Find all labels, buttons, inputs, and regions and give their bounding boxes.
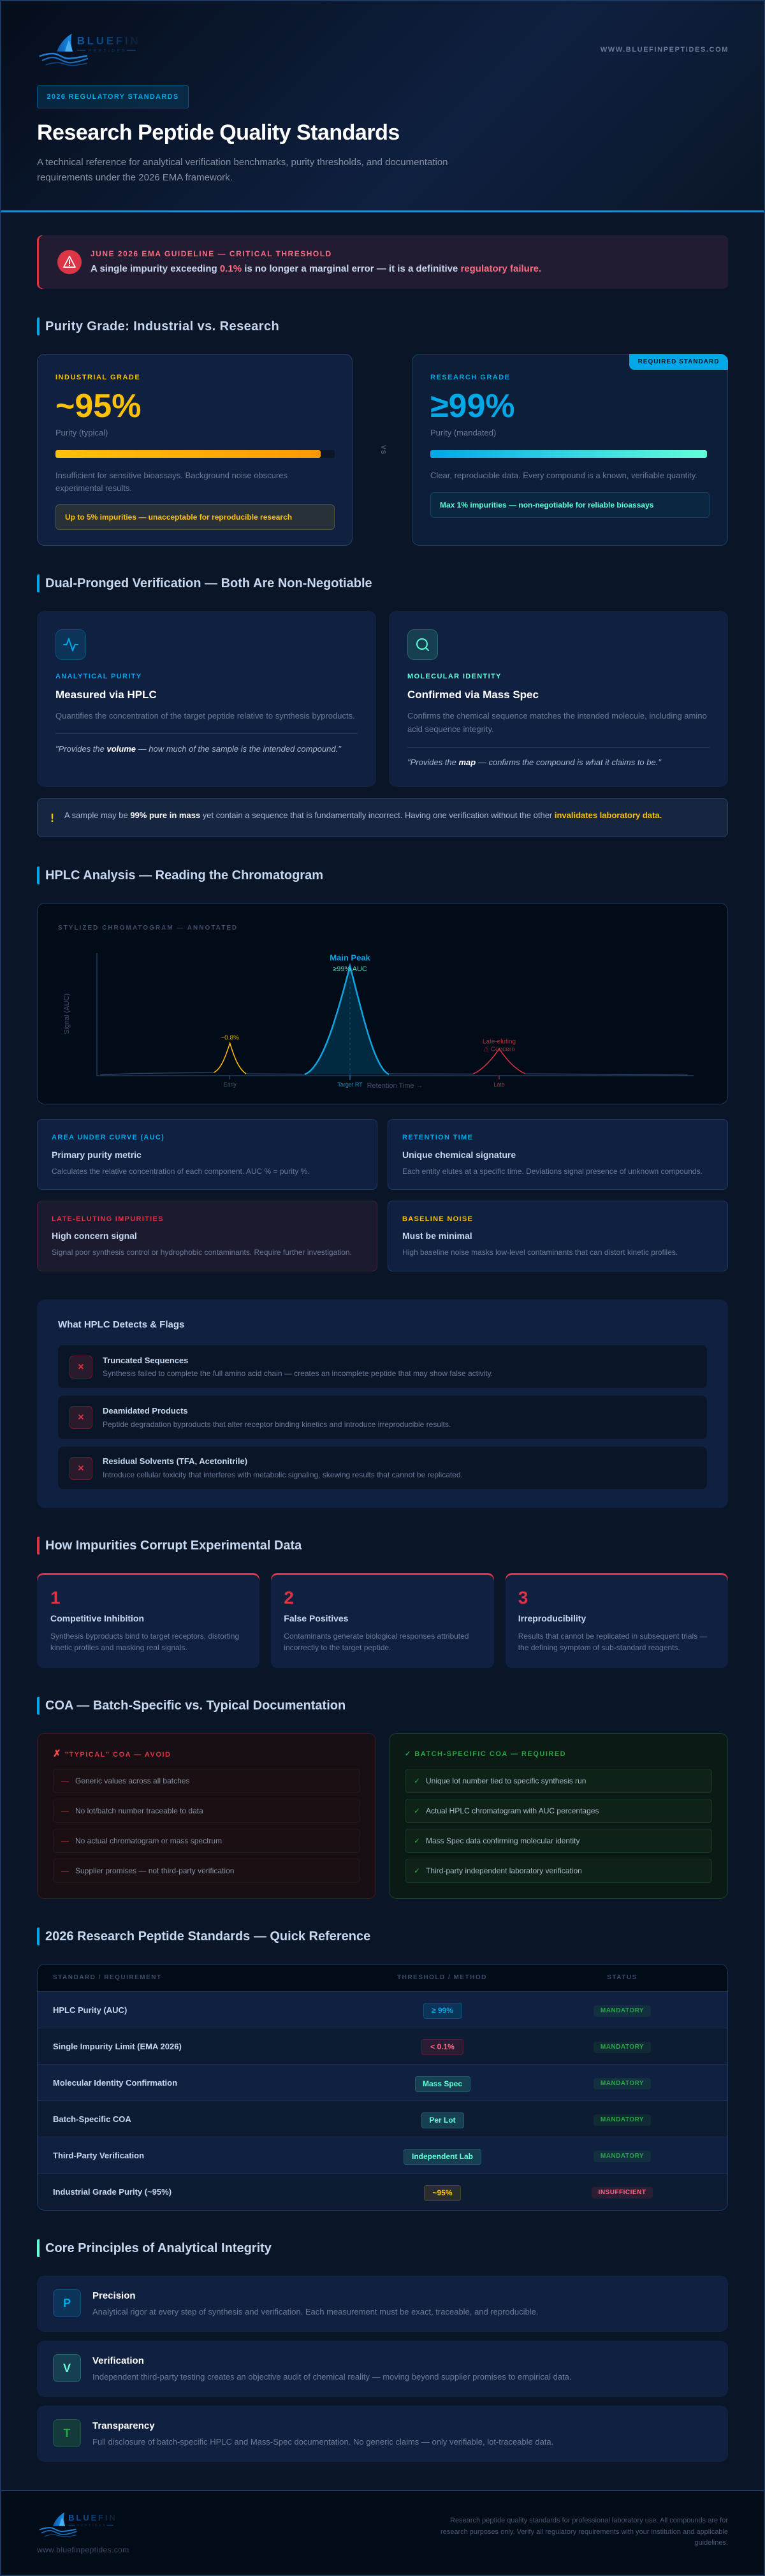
description <box>55 471 288 493</box>
row: single impurity <box>37 2028 728 2065</box>
heading: HPLC: HPLC Analysis — Reading the Chromatogram <box>45 868 323 882</box>
alert: EMA guideline <box>37 235 728 289</box>
label: AREA UNDER CURVE (AUC) <box>52 1134 164 1141</box>
heading: impurities: How Impurities Corrupt Experimental Data <box>45 1539 302 1553</box>
divider <box>407 747 710 748</box>
text: No lot/batch number traceable to data <box>75 1806 203 1815</box>
panel: typical COA <box>37 1733 376 1899</box>
panel: analytical purity <box>37 611 376 787</box>
name: Batch-Specific COA <box>53 2114 131 2124</box>
threshold: < 0.1% <box>430 2042 455 2051</box>
progress bar <box>430 450 707 458</box>
description: acid sequence integrity. <box>407 724 494 734</box>
item text: Synthesis failed to complete the full amino acid chain — creates an incomplete peptide that may show false activity. <box>103 1369 493 1378</box>
peak: main: ≥99% AUC <box>333 965 367 973</box>
description: Results that cannot be replicated in subsequent trials — <box>518 1632 708 1641</box>
description: Contaminants generate biological responses attributed <box>284 1632 469 1641</box>
label: RETENTION TIME <box>402 1134 473 1141</box>
value: ≥99% <box>430 388 515 425</box>
heading: dual-pronged <box>37 574 611 592</box>
dash: — <box>61 1866 69 1875</box>
item title: Residual Solvents (TFA, Acetonitrile) <box>103 1456 247 1466</box>
row: molecular identity <box>37 2065 728 2101</box>
threshold: ≥ 99% <box>432 2006 453 2015</box>
item: deamidated products <box>58 1396 707 1439</box>
regulatory badge <box>37 85 189 108</box>
title: Confirmed via Mass Spec <box>407 689 539 701</box>
table header <box>37 1964 728 1992</box>
icon: pulse <box>55 629 86 660</box>
table: quick reference <box>37 1964 728 2211</box>
label: BASELINE NOISE <box>402 1215 473 1223</box>
panel title: ✗ "TYPICAL" COA — AVOID <box>53 1748 171 1759</box>
check: ✓ <box>414 1806 420 1815</box>
panel: chromatogram <box>37 903 728 1104</box>
name: Third-Party Verification <box>53 2151 144 2160</box>
footer logo: PEPTIDES <box>77 2524 106 2528</box>
description <box>407 711 707 734</box>
panel: batch-specific COA <box>389 1733 728 1899</box>
divider <box>55 733 358 734</box>
threshold <box>414 2076 470 2092</box>
footer disclaimer <box>441 2517 728 2547</box>
number: 3 <box>518 1588 528 1607</box>
number: 2 <box>284 1588 294 1607</box>
axis label: y: Signal (AUC) <box>63 993 71 1034</box>
item <box>53 1799 360 1823</box>
description: Independent third-party testing creates an objective audit of chemical reality — moving beyond supplier promises to empirical data. <box>92 2372 572 2382</box>
title: Research Peptide Quality Standards <box>37 121 400 145</box>
description: Confirms the chemical sequence matches the intended molecule, including amino <box>407 711 707 721</box>
threshold: Independent Lab <box>412 2152 473 2161</box>
heading: quick reference <box>37 1928 611 1945</box>
title: Competitive Inhibition <box>50 1613 144 1623</box>
peak: late-eluting impurity: Late-eluting <box>483 1038 516 1046</box>
title: Irreproducibility <box>518 1613 586 1623</box>
card: verification <box>37 2341 728 2397</box>
footer disclaimer: guidelines. <box>694 2539 728 2547</box>
panel title: ✓ BATCH-SPECIFIC COA — REQUIRED <box>405 1750 566 1758</box>
alert text: A single impurity exceeding 0.1% is no longer a marginal error — it is a definitive regulatory failure. <box>91 263 541 274</box>
item text: Introduce cellular toxicity that interferes with metabolic signaling, skewing results that cannot be replicated. <box>103 1470 463 1479</box>
title: False Positives <box>284 1613 348 1623</box>
description: Signal poor synthesis control or hydrophobic contaminants. Require further investigation. <box>52 1248 352 1257</box>
status: MANDATORY <box>601 2116 644 2123</box>
description: High baseline noise masks low-level contaminants that can distort kinetic profiles. <box>402 1248 678 1257</box>
card: irreproducibility <box>506 1573 728 1668</box>
callout: Up to 5% impurities — unacceptable for reproducible research <box>65 513 292 522</box>
text: Mass Spec data confirming molecular identity <box>426 1836 579 1845</box>
description: Analytical rigor at every step of synthesis and verification. Each measurement must be exact, traceable, and reproducible. <box>92 2307 538 2316</box>
status <box>594 2151 651 2162</box>
card: false positives <box>271 1573 494 1668</box>
heading: quick reference: 2026 Research Peptide Standards — Quick Reference <box>45 1929 370 1943</box>
icon: V: V <box>63 2362 71 2375</box>
icon: cross: ✕ <box>78 1362 84 1372</box>
item <box>53 1829 360 1853</box>
axes <box>97 953 694 1076</box>
chart: annotated chromatogram <box>63 953 694 1090</box>
peak: late-eluting impurity: ⚠ Concern <box>483 1046 515 1053</box>
item text: Peptide degradation byproducts that alter receptor binding kinetics and introduce irreproducible results. <box>103 1420 451 1429</box>
heading: purity grade <box>37 318 611 335</box>
threshold: Per Lot <box>429 2116 456 2125</box>
notice: both verifications required <box>37 798 728 837</box>
status: MANDATORY <box>601 2153 644 2160</box>
panel: research grade <box>412 354 728 546</box>
title: Verification <box>92 2355 144 2366</box>
column: status: STATUS <box>607 1974 638 1981</box>
column: standard: STANDARD / REQUIREMENT <box>53 1974 162 1981</box>
peak: late-eluting impurity <box>473 1038 525 1088</box>
threshold <box>404 2149 481 2165</box>
caption: Purity (typical) <box>55 428 108 437</box>
label: RESEARCH GRADE <box>430 374 511 381</box>
icon: magnifier <box>407 629 438 660</box>
chart label: STYLIZED CHROMATOGRAM — ANNOTATED <box>58 925 238 932</box>
footer logo: BLUEFIN <box>68 2513 117 2522</box>
callout <box>430 492 710 518</box>
required badge: REQUIRED STANDARD <box>638 358 719 365</box>
dash: — <box>61 1776 69 1785</box>
description: experimental results. <box>55 483 132 493</box>
threshold: ~95% <box>432 2188 453 2197</box>
footer disclaimer: Research peptide quality standards for professional laboratory use. All compounds are for <box>450 2517 728 2524</box>
icon: cross: ✕ <box>78 1412 84 1422</box>
icon: P: P <box>63 2297 71 2309</box>
status: MANDATORY <box>601 2044 644 2051</box>
footer logo <box>40 2512 117 2538</box>
table border <box>37 1964 728 2211</box>
heading: core principles: Core Principles of Analytical Integrity <box>45 2241 272 2255</box>
card: precision <box>37 2276 728 2332</box>
subtitle: requirements under the 2026 EMA framework. <box>37 172 233 183</box>
description <box>50 1632 239 1652</box>
column: threshold: THRESHOLD / METHOD <box>397 1974 487 1981</box>
title: Must be minimal <box>402 1231 472 1241</box>
value: ~95% <box>55 388 141 425</box>
axis label: x: Retention Time → <box>367 1082 423 1090</box>
footer <box>0 2490 765 2576</box>
text: Actual HPLC chromatogram with AUC percentages <box>426 1806 599 1815</box>
item <box>405 1829 712 1853</box>
title: Unique chemical signature <box>402 1150 516 1160</box>
item <box>53 1859 360 1883</box>
icon: V <box>53 2354 81 2382</box>
label: MOLECULAR IDENTITY <box>407 673 502 680</box>
card: late-eluting impurities <box>37 1201 377 1271</box>
label: INDUSTRIAL GRADE <box>55 374 140 381</box>
item title: Truncated Sequences <box>103 1356 188 1365</box>
text: Generic values across all batches <box>75 1776 189 1785</box>
heading: purity grade: Purity Grade: Industrial vs. Research <box>45 319 279 333</box>
card: transparency <box>37 2406 728 2462</box>
peak: main: Target RT <box>337 1081 363 1088</box>
subtitle: A technical reference for analytical verification benchmarks, purity thresholds, and documentation <box>37 157 448 168</box>
status <box>592 2187 653 2199</box>
heading: HPLC <box>37 867 611 884</box>
icon: T: T <box>64 2427 70 2440</box>
peak: main: Main Peak <box>330 953 371 963</box>
label: LATE-ELUTING IMPURITIES <box>52 1215 164 1223</box>
text: No actual chromatogram or mass spectrum <box>75 1836 222 1845</box>
item <box>405 1769 712 1793</box>
card: competitive inhibition <box>37 1573 259 1668</box>
label: ANALYTICAL PURITY <box>55 673 142 680</box>
icon: exclamation: ! <box>50 812 54 824</box>
dash: — <box>61 1806 69 1815</box>
website url: WWW.BLUEFINPEPTIDES.COM <box>601 46 729 54</box>
baseline <box>101 1072 688 1075</box>
description: Clear, reproducible data. Every compound is a known, verifiable quantity. <box>430 471 697 480</box>
check: ✓ <box>414 1866 420 1875</box>
heading: COA <box>37 1697 611 1715</box>
check: ✓ <box>414 1836 420 1845</box>
heading: core principles <box>37 2239 611 2257</box>
item: residual solvents <box>58 1447 707 1489</box>
icon: T <box>53 2419 81 2447</box>
panel: molecular identity <box>389 611 728 787</box>
check: ✓ <box>414 1776 420 1785</box>
peak: early impurity: ~0.8% <box>221 1034 239 1042</box>
item title: Deamidated Products <box>103 1406 188 1416</box>
status: MANDATORY <box>601 2007 644 2014</box>
peak: main <box>305 953 389 1088</box>
item: truncated sequences <box>58 1345 707 1388</box>
title: High concern signal <box>52 1231 137 1241</box>
logo: Bluefin Peptides: BLUEFIN <box>77 34 140 47</box>
card: baseline noise <box>388 1201 728 1271</box>
alert label: JUNE 2026 EMA GUIDELINE — CRITICAL THRESHOLD <box>91 249 332 258</box>
footer disclaimer: research purposes only. Verify all regulatory requirements with your institution and applicable <box>441 2528 728 2536</box>
description: Insufficient for sensitive bioassays. Background noise obscures <box>55 471 288 480</box>
description: Calculates the relative concentration of each component. AUC % = purity %. <box>52 1167 310 1176</box>
title: Precision <box>92 2290 136 2301</box>
icon: P <box>53 2289 81 2317</box>
card: retention time <box>388 1119 728 1190</box>
peak: early impurity <box>214 1034 246 1088</box>
subtitle <box>37 157 448 183</box>
panel: industrial grade <box>37 354 353 546</box>
heading: dual-pronged: Dual-Pronged Verification — Both Are Non-Negotiable <box>45 576 372 590</box>
text: Unique lot number tied to specific synthesis run <box>426 1776 586 1785</box>
name: Industrial Grade Purity (~95%) <box>53 2187 171 2197</box>
progress bar <box>55 450 335 458</box>
caption: Purity (mandated) <box>430 428 496 437</box>
icon: cross <box>69 1356 92 1379</box>
description: incorrectly to the target peptide. <box>284 1643 391 1652</box>
quote: "Provides the volume — how much of the sample is the intended compound." <box>55 744 341 754</box>
description: Each entity elutes at a specific time. Deviations signal presence of unknown compounds. <box>402 1167 703 1176</box>
description: Quantifies the concentration of the target peptide relative to synthesis byproducts. <box>55 711 355 721</box>
description: Full disclosure of batch-specific HPLC and Mass-Spec documentation. No generic claims — only verifiable, lot-traceable data. <box>92 2437 553 2447</box>
status: INSUFFICIENT <box>599 2189 646 2196</box>
text: Supplier promises — not third-party verification <box>75 1866 234 1875</box>
status: MANDATORY <box>601 2080 644 2087</box>
name: HPLC Purity (AUC) <box>53 2005 127 2015</box>
logo: Bluefin Peptides: PEPTIDES <box>89 48 127 54</box>
threshold <box>423 2003 462 2019</box>
vs label: VS <box>379 445 386 455</box>
item <box>405 1859 712 1883</box>
row: HPLC purity <box>37 1992 728 2028</box>
icon: cross <box>69 1457 92 1480</box>
logo: Bluefin Peptides <box>39 33 140 66</box>
row: batch-specific COA <box>37 2101 728 2137</box>
description: Synthesis byproducts bind to target receptors, distorting <box>50 1632 239 1641</box>
icon: cross: ✕ <box>78 1463 84 1473</box>
title: Primary purity metric <box>52 1150 142 1160</box>
icon: cross <box>69 1406 92 1429</box>
callout: Max 1% impurities — non-negotiable for reliable bioassays <box>440 501 653 509</box>
description: the defining symptom of sub-standard reagents. <box>518 1643 680 1652</box>
status <box>594 2114 651 2126</box>
callout <box>55 504 335 530</box>
row: third-party verification <box>37 2137 728 2174</box>
threshold <box>421 2112 464 2128</box>
name: Molecular Identity Confirmation <box>53 2078 177 2088</box>
heading: COA: COA — Batch-Specific vs. Typical Documentation <box>45 1699 346 1713</box>
number: 1 <box>50 1588 61 1607</box>
heading: impurities <box>37 1537 611 1555</box>
threshold <box>421 2039 463 2055</box>
dash: — <box>61 1836 69 1845</box>
threshold: Mass Spec <box>423 2079 462 2088</box>
status <box>594 2005 651 2017</box>
panel title: What HPLC Detects & Flags <box>58 1319 184 1330</box>
header <box>0 0 765 212</box>
card: area under curve <box>37 1119 377 1190</box>
peak: early impurity: Early <box>223 1081 237 1088</box>
status <box>594 2042 651 2053</box>
peak: late-eluting impurity: Late <box>493 1081 505 1088</box>
required badge <box>629 354 728 370</box>
description <box>284 1632 469 1652</box>
panel: what HPLC detects <box>37 1299 728 1508</box>
title: Transparency <box>92 2420 155 2431</box>
threshold <box>424 2185 461 2201</box>
regulatory badge: 2026 REGULATORY STANDARDS <box>47 93 179 101</box>
description <box>518 1632 708 1652</box>
item <box>53 1769 360 1793</box>
quote: "Provides the map — confirms the compound is what it claims to be." <box>407 757 661 767</box>
title: Measured via HPLC <box>55 689 157 701</box>
icon: warning <box>57 250 82 274</box>
item <box>405 1799 712 1823</box>
name: Single Impurity Limit (EMA 2026) <box>53 2042 182 2051</box>
status <box>594 2078 651 2089</box>
text: Third-party independent laboratory verification <box>426 1866 582 1875</box>
description: kinetic profiles and masking real signals. <box>50 1643 187 1652</box>
row: industrial grade <box>53 2185 653 2201</box>
footer url: www.bluefinpeptides.com <box>37 2545 129 2554</box>
notice text: A sample may be 99% pure in mass yet contain a sequence that is fundamentally incorrect. Having one verification without the other invalidates laboratory data. <box>64 810 662 820</box>
